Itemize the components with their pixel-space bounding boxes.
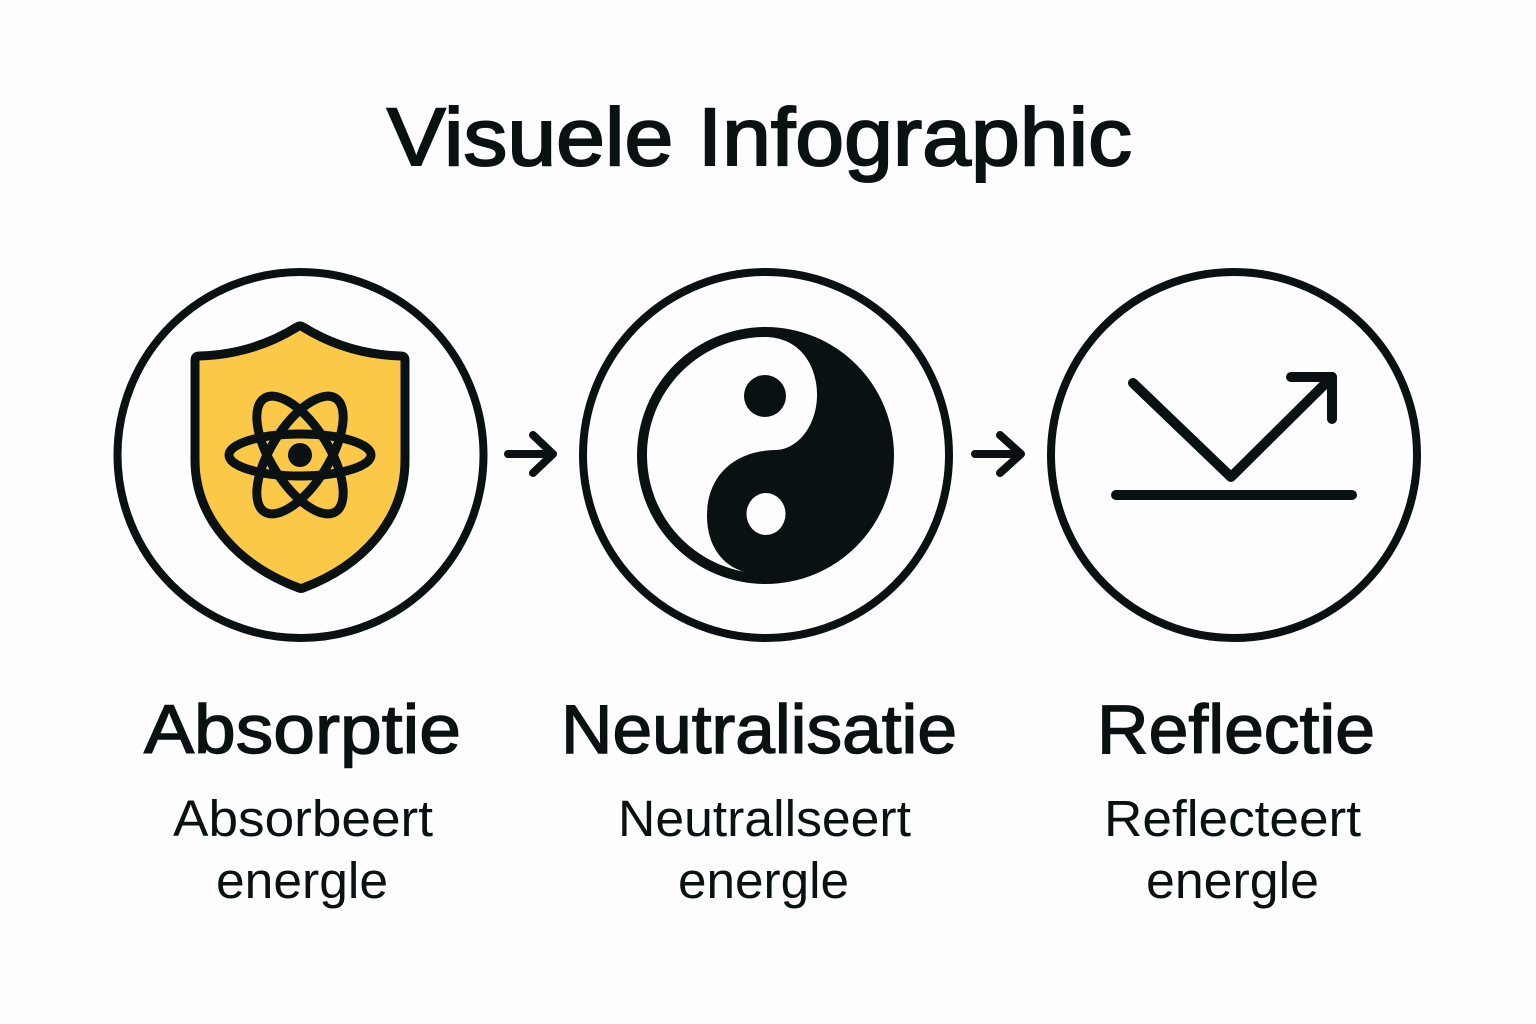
black dot xyxy=(744,375,786,417)
circle outline: reflectie xyxy=(1051,272,1417,638)
atom xyxy=(229,383,371,527)
icon: shield with atom xyxy=(195,326,405,588)
yin yang white swirl xyxy=(647,337,817,572)
circle outline: absorptie xyxy=(118,272,484,638)
panel: reflectie xyxy=(1051,272,1417,638)
arrow: absorptie to neutralisatie xyxy=(508,435,553,473)
icon: yin yang xyxy=(637,327,894,584)
panel: neutralisatie xyxy=(583,272,949,638)
circle outline: neutralisatie xyxy=(583,272,949,638)
text block: reflectie: Reflecteert xyxy=(1104,790,1361,847)
text block: reflectie: energle xyxy=(1146,852,1319,909)
yin yang disc xyxy=(637,327,894,584)
text block: neutralisatie: energle xyxy=(678,852,849,909)
text block: absorptie: Absorptie xyxy=(144,691,461,768)
title: Visuele Infographic xyxy=(387,92,1132,183)
text block: absorptie: energle xyxy=(216,852,388,909)
shield xyxy=(195,326,405,588)
text block: neutralisatie xyxy=(561,691,957,909)
text block: reflectie: Reflectie xyxy=(1097,691,1375,768)
text block: absorptie xyxy=(144,691,461,909)
panel: absorptie xyxy=(118,272,484,638)
white dot xyxy=(746,493,786,535)
arrow: neutralisatie to reflectie xyxy=(975,435,1021,473)
text block: reflectie xyxy=(1097,691,1375,909)
text block: neutralisatie: Neutrallseert xyxy=(618,790,911,847)
icon: reflection arrow xyxy=(1116,377,1352,495)
text block: neutralisatie: Neutralisatie xyxy=(561,691,957,768)
text block: absorptie: Absorbeert xyxy=(173,790,433,847)
